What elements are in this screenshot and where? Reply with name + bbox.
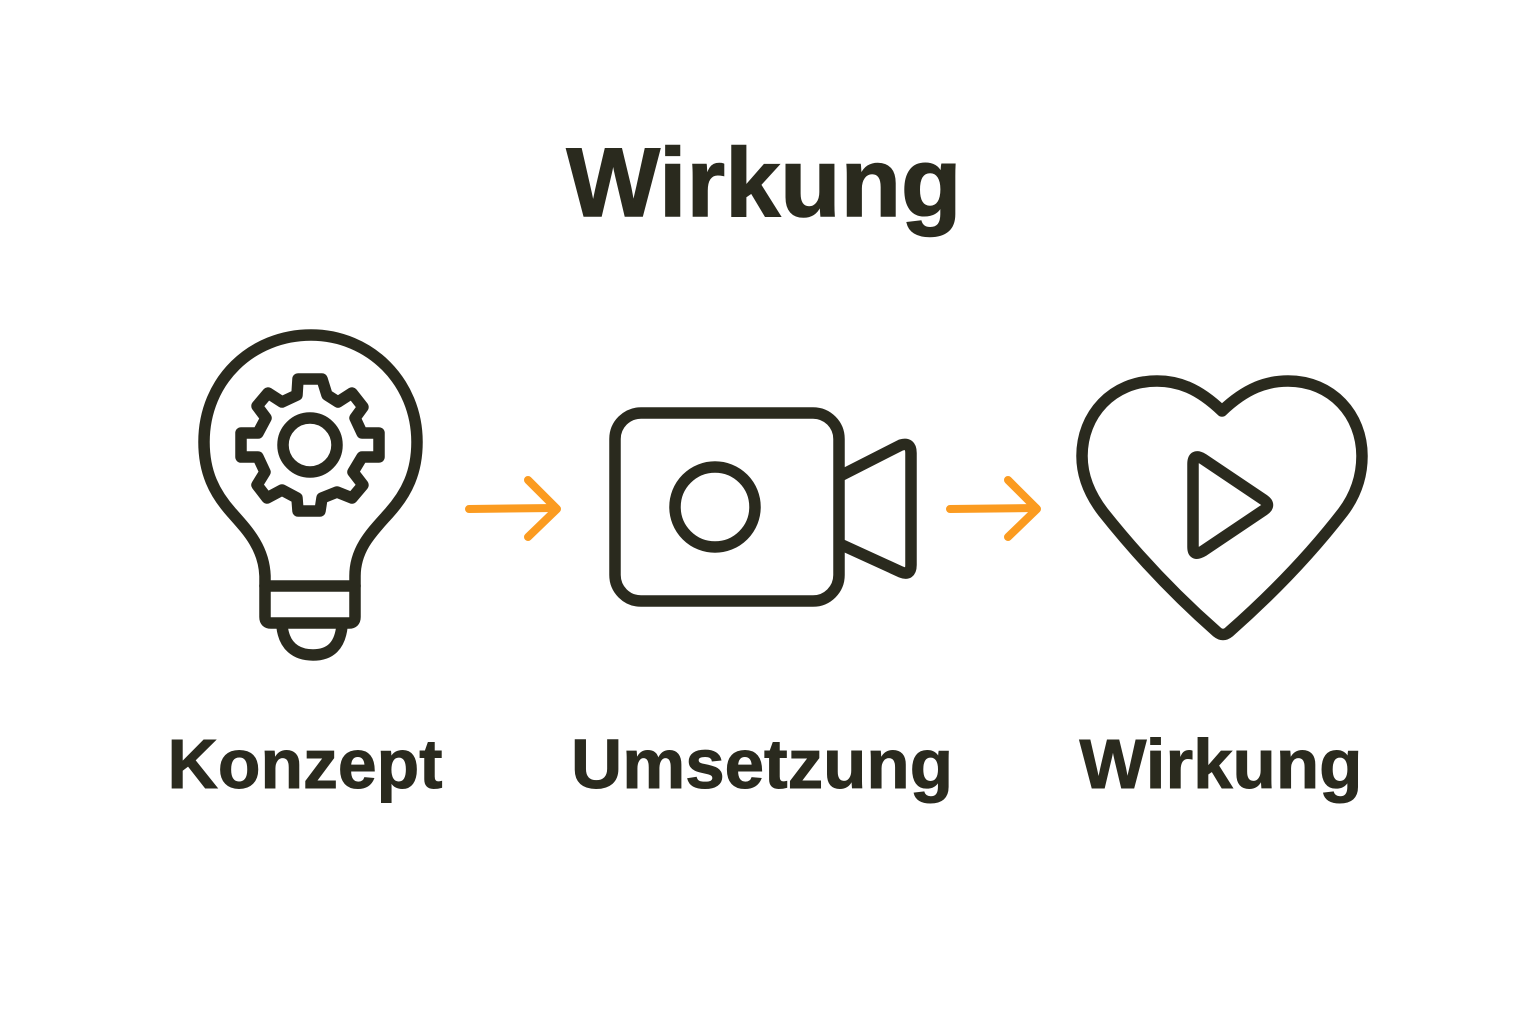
icon: heart with play symbol: [1082, 381, 1362, 634]
icon: video camera: [615, 413, 911, 601]
label: Wirkung: Wirkung: [1080, 725, 1362, 803]
title: Wirkung: [566, 128, 962, 237]
icon: light bulb with gear: [204, 335, 417, 655]
label: Konzept: Konzept: [168, 725, 442, 803]
arrow: implementation to impact: [950, 480, 1037, 537]
label: Umsetzung: Umsetzung: [571, 725, 953, 803]
arrow: concept to implementation: [469, 480, 557, 537]
